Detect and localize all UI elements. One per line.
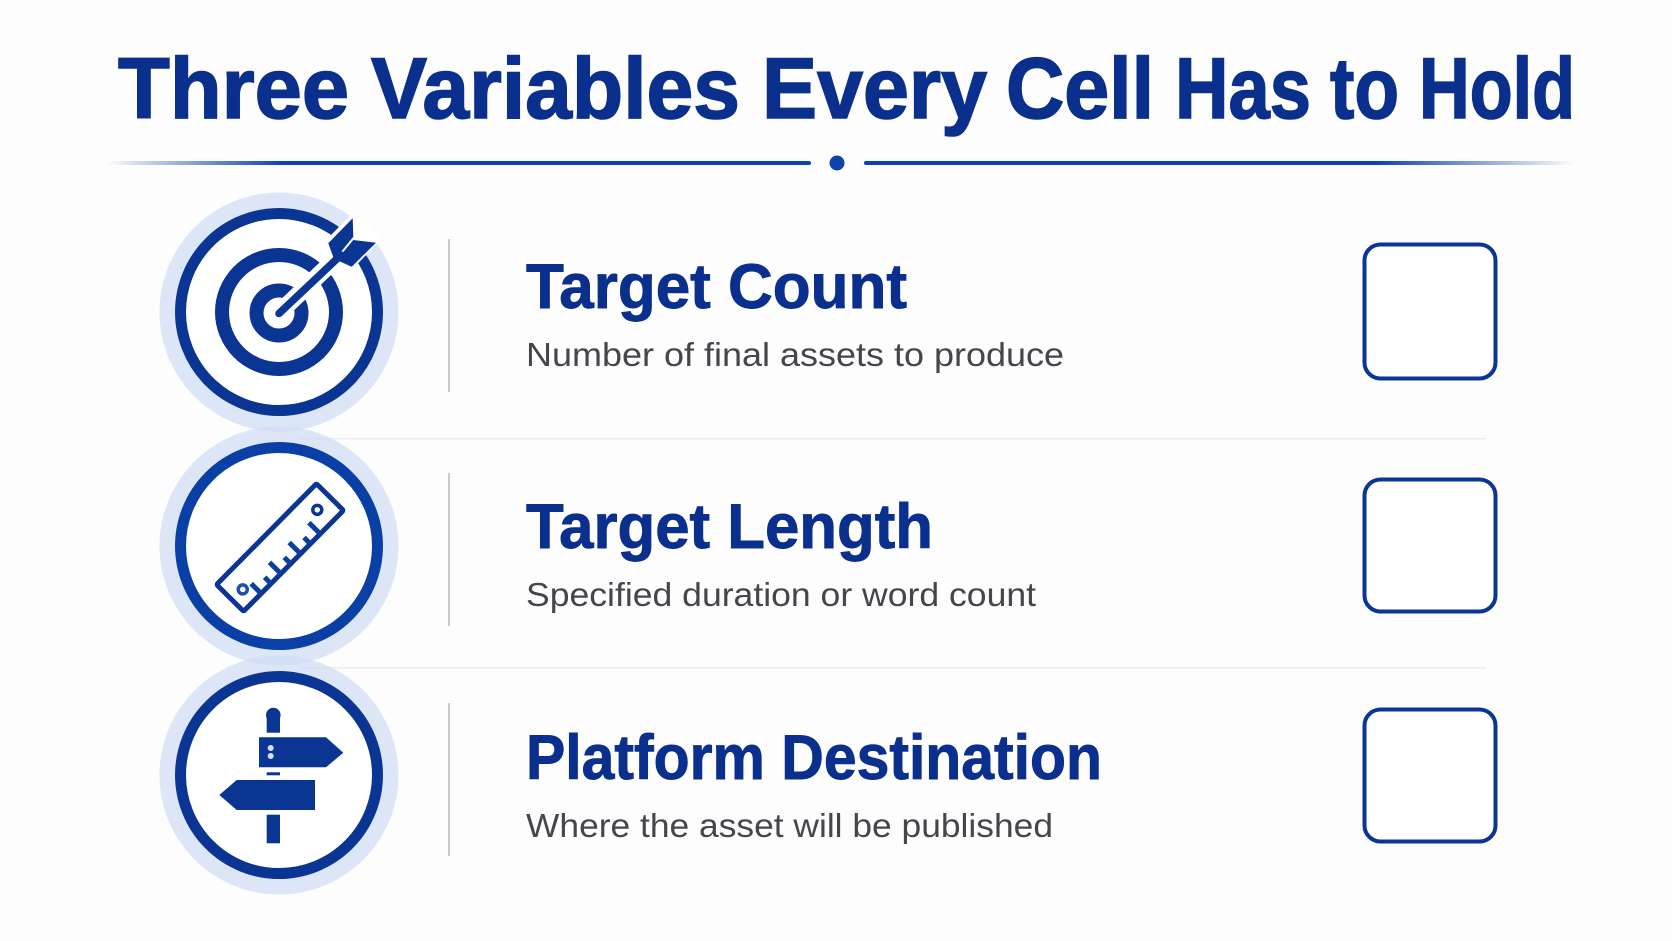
title: Cell	[1006, 41, 1154, 137]
checkbox	[1364, 710, 1496, 842]
description: Number of final assets to produce	[526, 336, 1064, 373]
separator	[448, 473, 450, 626]
title: Three	[118, 41, 349, 137]
checkbox	[1364, 244, 1496, 378]
separator	[448, 239, 450, 392]
title: Has	[1175, 41, 1311, 137]
title: to	[1330, 41, 1399, 137]
checkbox	[1364, 480, 1496, 612]
heading: Target Count	[526, 252, 907, 322]
title: Hold	[1419, 41, 1575, 137]
title: Every	[762, 41, 987, 137]
separator	[448, 703, 450, 856]
heading: Target Length	[526, 492, 933, 562]
icon: signpost	[160, 656, 398, 894]
icon: target with arrow	[160, 192, 398, 432]
title: Variables	[371, 41, 740, 137]
panel: platform destination	[160, 656, 1496, 894]
description: Where the asset will be published	[526, 807, 1053, 844]
panel: target count	[160, 192, 1496, 432]
icon: ruler	[160, 426, 398, 666]
panel: target length	[160, 426, 1496, 666]
description: Specified duration or word count	[526, 576, 1036, 613]
title divider	[106, 156, 1575, 170]
heading: Platform Destination	[526, 723, 1102, 793]
